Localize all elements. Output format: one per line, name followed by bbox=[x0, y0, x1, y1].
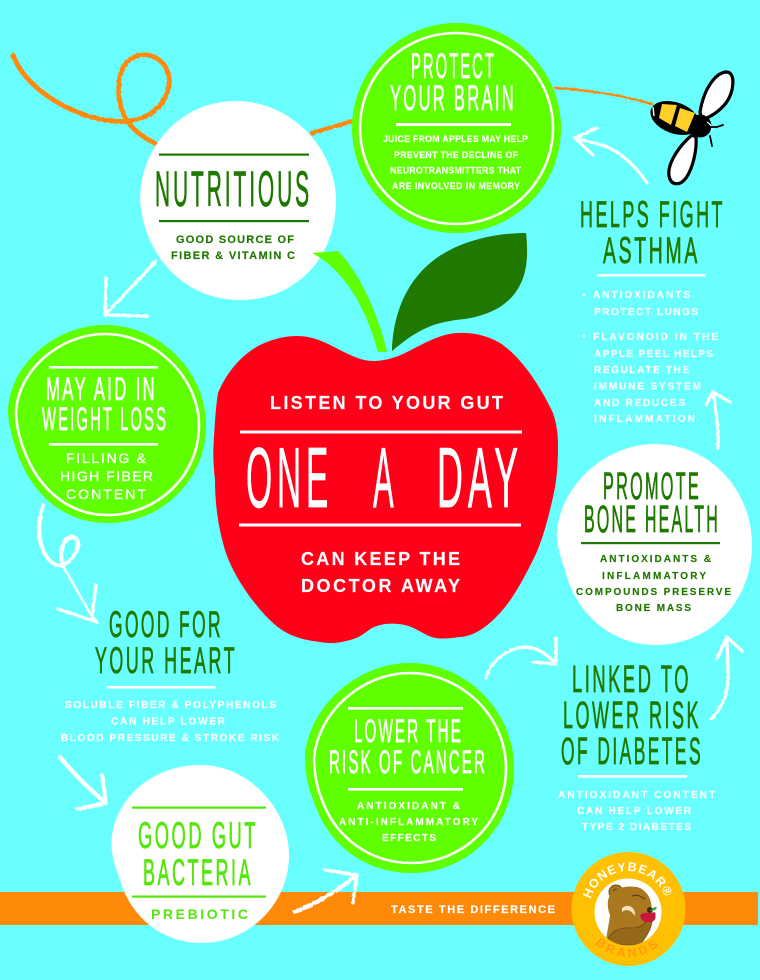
text: nutritious detail: FIBER & VITAMIN C bbox=[171, 250, 295, 262]
text: heart detail bbox=[61, 700, 280, 744]
text: bone health detail: COMPOUNDS PRESERVE bbox=[576, 587, 731, 598]
text: asthma bullets: PROTECT LUNGS bbox=[594, 307, 698, 318]
arrow: gut to cancer bbox=[295, 870, 357, 912]
bee flight trail left loop bbox=[13, 55, 169, 144]
heading: linked to lower risk of diabetes bbox=[561, 659, 703, 773]
apple stem bbox=[312, 251, 387, 352]
text block: helps fight asthma bbox=[580, 194, 725, 425]
bee flight trail middle bbox=[312, 120, 356, 133]
panel: apple bbox=[213, 333, 558, 643]
text: diabetes detail: TYPE 2 DIABETES bbox=[582, 822, 691, 833]
text: prebiotic: PREBIOTIC bbox=[151, 906, 248, 922]
panel: nutritious bbox=[140, 101, 336, 300]
text: weight loss detail: CONTENT bbox=[66, 486, 146, 502]
text: asthma bullets: INFLAMMATION bbox=[594, 414, 695, 425]
heading: protect your brain: PROTECT bbox=[411, 47, 496, 86]
text: cancer detail: ANTIOXIDANT & bbox=[357, 801, 460, 812]
heading: lower the risk of cancer: LOWER THE bbox=[354, 713, 463, 749]
text: bone health detail bbox=[576, 554, 731, 614]
text: cancer detail: EFFECTS bbox=[382, 833, 436, 844]
arrow: weight loss to heart bbox=[39, 505, 97, 622]
heading: helps fight asthma bbox=[580, 194, 725, 271]
arrow: nutritious to weight loss bbox=[105, 261, 156, 316]
bee flight trail right bbox=[555, 88, 652, 104]
text: asthma bullets: IMMUNE SYSTEM bbox=[594, 382, 701, 392]
text block: good for your heart: YOUR HEART bbox=[95, 640, 237, 681]
logo: honeybear brands bbox=[572, 852, 686, 966]
text: can keep the doctor away: DOCTOR AWAY bbox=[301, 576, 460, 596]
heading: may aid in weight loss: MAY AID IN bbox=[46, 371, 157, 407]
text: heart detail: BLOOD PRESSURE & STROKE RISK bbox=[61, 733, 280, 744]
arrow: heart to gut bbox=[60, 757, 106, 809]
text: heart detail: CAN HELP LOWER bbox=[111, 716, 226, 728]
arrow: diabetes to bone health bbox=[711, 637, 742, 719]
text: weight loss detail: FILLING & bbox=[66, 450, 147, 466]
heading: may aid in weight loss bbox=[42, 371, 168, 437]
heading: good for your heart bbox=[95, 604, 237, 681]
text: can keep the doctor away: CAN KEEP THE bbox=[301, 549, 460, 569]
heading: lower the risk of cancer bbox=[329, 713, 487, 780]
text block: good for your heart bbox=[61, 604, 280, 744]
text: nutritious detail bbox=[171, 234, 295, 262]
text: asthma bullets bbox=[583, 290, 718, 425]
text: bone health detail: BONE MASS bbox=[616, 603, 691, 614]
text: protect your brain detail: ARE INVOLVED IN MEMORY bbox=[392, 181, 520, 191]
heading: one a day: ONE bbox=[246, 431, 333, 526]
logo wordmark top: HONEYBEAR® bbox=[582, 862, 672, 898]
panel: apple: DAY bbox=[437, 431, 523, 526]
text: cancer detail: ANTI-INFLAMMATORY bbox=[339, 817, 478, 828]
text: asthma bullets: REGULATE THE bbox=[594, 365, 689, 376]
text: protect your brain detail: NEUROTRANSMITTERS THAT bbox=[390, 166, 522, 176]
heading: good gut bacteria: BACTERIA bbox=[143, 852, 253, 893]
heading: one a day: A bbox=[373, 431, 398, 526]
text: bone health detail: ANTIOXIDANTS & bbox=[600, 554, 711, 565]
icon: bee bbox=[646, 72, 733, 184]
panel: good gut bacteria: GOOD GUT bbox=[138, 815, 258, 856]
text: asthma bullets: FLAVONOID IN THE bbox=[593, 332, 718, 343]
text: asthma bullets: APPLE PEEL HELPS bbox=[594, 349, 713, 360]
panel: good gut bacteria bbox=[111, 765, 289, 943]
text: listen to your gut: LISTEN TO YOUR GUT bbox=[270, 393, 503, 413]
orange footer band bbox=[0, 892, 758, 925]
logo wordmark bottom: BRANDS bbox=[596, 938, 657, 958]
text: asthma bullets: ANTIOXIDANTS bbox=[593, 290, 690, 301]
heading: good gut bacteria bbox=[138, 815, 258, 893]
heading: good for your heart: GOOD FOR bbox=[109, 604, 223, 645]
text: diabetes detail bbox=[558, 790, 715, 833]
panel: promote bone health bbox=[557, 444, 752, 645]
text: cancer detail bbox=[339, 801, 478, 844]
text: protect your brain detail: JUICE FROM APPLES MAY HELP bbox=[383, 134, 528, 144]
text block: linked to lower risk of diabetes bbox=[558, 659, 715, 833]
text: nutritious detail: GOOD SOURCE OF bbox=[176, 234, 294, 246]
heading: protect your brain bbox=[390, 47, 516, 118]
text: protect your brain detail: PREVENT THE DECLINE OF bbox=[394, 150, 519, 160]
panel: protect your brain: YOUR BRAIN bbox=[390, 79, 516, 118]
panel: may aid in weight loss: WEIGHT LOSS bbox=[42, 401, 168, 437]
arrow: cancer to diabetes bbox=[486, 638, 556, 678]
panel: may aid in weight loss bbox=[8, 325, 206, 523]
text: bone health detail: INFLAMMATORY bbox=[602, 571, 706, 582]
heading: promote bone health bbox=[584, 466, 720, 541]
text: NUTRITIOUS bbox=[155, 161, 312, 217]
text: can keep the doctor away bbox=[301, 549, 460, 596]
text: diabetes detail: ANTIOXIDANT CONTENT bbox=[558, 790, 715, 801]
tagline: TASTE THE DIFFERENCE bbox=[391, 904, 555, 916]
text: asthma bullets: AND REDUCES bbox=[594, 398, 685, 409]
panel: lower the risk of cancer bbox=[305, 663, 514, 873]
leaf bbox=[392, 233, 527, 351]
arrow: bone health to asthma bbox=[706, 392, 730, 448]
text: diabetes detail: CAN HELP LOWER bbox=[577, 806, 692, 817]
text: protect your brain detail bbox=[383, 134, 528, 191]
arrow: bee to brain bbox=[575, 128, 647, 183]
panel: lower the risk of cancer: RISK OF CANCER bbox=[329, 744, 487, 780]
text: weight loss detail: HIGH FIBER bbox=[60, 468, 153, 484]
panel: protect your brain bbox=[352, 23, 561, 233]
icon: bear eating apple bbox=[606, 885, 657, 945]
text: heart detail: SOLUBLE FIBER & POLYPHENOLS bbox=[65, 700, 276, 711]
text: weight loss detail bbox=[60, 450, 153, 502]
